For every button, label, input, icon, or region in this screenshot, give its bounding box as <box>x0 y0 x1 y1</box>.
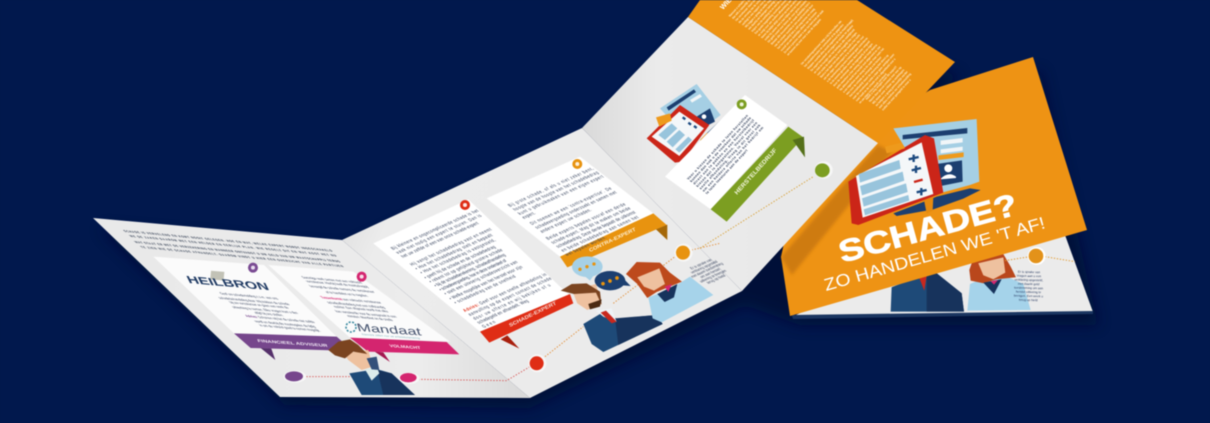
middle panel small caption: met daarin toestemming <box>690 262 724 279</box>
flap text column 2: was voor de schade en ontvangt u de factuur <box>844 56 883 96</box>
text: financieel adviseur <box>217 291 322 333</box>
text: volmacht: kan verzekerde voor de aanspraak in een <box>333 309 399 319</box>
person: contra-expert woman <box>626 262 713 322</box>
flap text column 1: het herstelbedrijf dat u zelf mag kiezen en vraag <box>776 7 816 50</box>
speech bubbles <box>572 256 631 290</box>
text: contra-expert: schade-expert. Mag dit te maken om beide <box>549 206 632 245</box>
text: schade-expert: Hij vangt het schadebedrag vast en neemt <box>408 227 493 267</box>
text: volmacht: schadeafhandeling met een zelfstandig <box>325 300 387 309</box>
purple ribbon <box>234 333 353 351</box>
text: volmacht: af te handelen en te regelen. <box>324 290 370 298</box>
flap text column 3: Heeft u nog vragen over dit traject? <box>864 65 898 101</box>
panel: left header text: WE DE ZAKEN DAAROM MET EEN HELDER EN EERLIJK PLAN. WIE REGELT DIT EN WAT KOST HET NU <box>128 235 338 257</box>
text: herstelbedrijf: kunnen dan ook u de voorkeur dat uw schade <box>689 116 752 183</box>
flap text column 2: Bent u het daar niet mee eens dan heeft u het recht <box>819 33 861 78</box>
flap text column 2: vast zodat de uitkering zo snel mogelijk kan volgen <box>815 31 858 76</box>
flap text column 1: en kunnen wij snel voor u aan de slag gaan <box>786 17 822 56</box>
panel: herstelbedrijf card <box>665 95 833 248</box>
flap text column 2: naar heeft en de schade snel is afgewikkeld voor u <box>854 57 897 102</box>
text: contra-expert: kunt u gebruikmaken van een eigen expert <box>516 174 605 216</box>
flap text column 3: Wij staan voor u klaar op werkdagen <box>871 68 906 105</box>
text: contra-expert: wel bepalen worden. <box>563 235 608 257</box>
flap text column 1: Zo weet u precies waar u aan toe bent met uw zaak <box>782 9 825 54</box>
green ribbon <box>711 127 803 222</box>
shadow from flap on cover <box>781 145 892 275</box>
cover small caption: Er is sprake van <box>1018 270 1040 274</box>
cover icon: form and card <box>848 119 981 225</box>
cover subtitle: ZO HANDELEN WE 'T AF! <box>822 213 1047 295</box>
cover small caption <box>1014 270 1044 302</box>
flap text column 2: u uw eigendom weer terug in de oude staat zoals het <box>841 47 885 93</box>
text: contra-expert: schadebedrag. Deze derde bepaalt de uitkomst <box>554 210 637 249</box>
panel: financieel adviseur card <box>153 257 353 360</box>
ribbon label: volmacht: VOLMACHT <box>388 343 422 350</box>
text: volmacht: minuten. Mandaat en de snelle <box>345 314 395 322</box>
text: contra-expert: Bij grote schade, of als u niet zeker bent, <box>506 166 595 208</box>
ribbon label: schade-expert: SCHADE-EXPERT <box>508 301 558 329</box>
middle panel small caption <box>689 258 728 285</box>
orange ribbon <box>560 213 667 267</box>
pink ribbon <box>350 338 459 354</box>
text: schade-expert: Geen <box>480 319 497 329</box>
text: herstelbedrijf: direct aan te pakken en een herstelbedrijf <box>692 118 756 185</box>
flap text column 2: polis waardoor u hier weinig risico aan loopt daarna <box>835 43 879 89</box>
flap text column 1: vooraf om een duidelijke offerte van de kosten <box>779 11 818 52</box>
flap text column 2: De expert beoordeelt vervolgens de schade ter plaatse <box>809 24 855 72</box>
icon: form and card on right panel <box>647 84 726 163</box>
back brochure: cover <box>781 57 1093 319</box>
text: contra-expert: Beide experts bepalen vooraf een derde <box>544 202 627 241</box>
cover small caption: brengen. Een week u <box>1014 294 1043 298</box>
cover title: SCHADE? <box>835 187 1021 270</box>
text: financieel adviseur: uitwerking te nemen. Elke vragen kunt u dan <box>230 305 300 315</box>
text: herstelbedrijf: snelle afhandeling. Vraag in dit geval ook <box>698 123 762 190</box>
flap text column 2: naar de verzekeraar zodat u daar geen omkijken meer <box>851 53 896 100</box>
flap text column 2: kloppen voordat alles wordt ingediend bij de maatschappij <box>806 18 854 70</box>
logo: Mandaat <box>346 322 424 340</box>
text: schade-expert: • Hoe het schadebedrag stelt en bepaalt <box>413 233 494 271</box>
text: schade-expert: • bij de schadeberekening, schadeafhandeling <box>432 252 507 288</box>
ribbon label: contra-expert: CONTRA-EXPERT <box>588 227 637 254</box>
text: schade-expert <box>389 208 553 329</box>
logo: Mandaat: financiele zaken voor uw schadebehandeling <box>361 333 421 340</box>
text: schade-expert: • rekent tot op gelijkheid grotere schade <box>427 247 504 284</box>
text: financieel adviseur: Geef uw schademelding z.s.m. aan ons <box>218 291 280 300</box>
cover small caption: Vragen aan u een <box>1017 274 1041 278</box>
open brochure <box>93 0 955 398</box>
drop shadows <box>100 20 1098 408</box>
text: schade-expert: door uw offerte en wij bekijken of u <box>471 283 552 321</box>
text: schade-expert: • schadevergoeding, hoe in deze onderdeel of <box>437 258 508 292</box>
flap text column 3: met alles rondom uw schademelding <box>877 72 912 109</box>
flap text column 2: het schadeformulier en controleert of de gegevens <box>802 23 845 68</box>
text: schade-expert: vaak niet nodig een expert te sturen. Dan is <box>394 213 483 255</box>
logo: Heilbron: HEILBRON <box>185 275 271 293</box>
text: schade-expert: aanvulling op de expert contact de schade <box>466 276 553 317</box>
middle panel small caption: om aan herstel <box>699 267 721 279</box>
flap text column 2: en stelt de hoogte van het bedrag in alle redelijkheid <box>812 28 856 74</box>
text: financieel adviseur: Advies: Schuiven wij het de schade niet zelfde <box>243 314 317 324</box>
ribbon label: financieel adviseur: FINANCIEEL ADVISEUR <box>256 338 328 348</box>
panel: left header text: WAT STAAT ER MET DE VERZEKERING EN WANNEER ONTVANGT U UW GELD VAN UW MAATSCHAPPIJ TERUG <box>133 241 342 263</box>
text: herstelbedrijf: te laten toesturen aan de expert <box>705 148 749 195</box>
text: contra-expert <box>506 166 640 257</box>
cover small caption: toestemming om aan <box>1014 286 1043 290</box>
text: schade-expert: Advies: Geef voor een snelle afhandeling in <box>461 272 548 313</box>
page: left panel <box>93 218 530 398</box>
text: volmacht: bevoegd de schade namens de verzekeraar <box>307 284 376 294</box>
timeline: left dots <box>284 367 530 384</box>
cover small caption: herstel uitkering te <box>1016 290 1041 294</box>
text: schade-expert: • stelt een uitvoerig schadeoverzicht van <box>442 259 519 296</box>
text: schade-expert: • geeft hij de schade en de schadebedrag <box>422 244 497 280</box>
text: schade-expert: • Hoe het schadebedrag is vastgesteld, <box>418 238 497 275</box>
text: herstelbedrijf: kiezen dat is aangesloten. Vooral voor een <box>695 121 758 188</box>
text: financieel adviseur: altijd bij ons stellen. <box>252 311 285 317</box>
logo: Mandaat: Mandaat <box>355 322 424 339</box>
text: financieel adviseur: in om de vakstel goed te nemen mogelijk. <box>257 323 322 333</box>
panel: contra-expert card <box>487 157 667 267</box>
text: financieel adviseur: bij uw verzekeraar en gaan aan werk de <box>227 300 291 309</box>
page: right panel <box>582 17 878 291</box>
text: volmacht: Sommige werk samen met een volmacht <box>300 275 364 285</box>
panel: schade-expert card <box>373 199 573 349</box>
text: schade-expert: schadegeld en afhandelt. Weg <box>475 298 530 325</box>
panel: left header text: SCHADE IS VERVELEND EN KOMT NOOIT GELEGEN. HOE EN WAT, WELKE EXPERT WORDT INGESCHAKELD <box>122 230 334 253</box>
panel: left header text: TE ZIEN WIE DE SCHADE AFHANDELT. DAAROM VINDT U HIER EEN OVERZICHT VAN ALLE PARTIJEN <box>139 246 345 268</box>
flap text column 2: Het herstelbedrijf stuurt de rekening dan direct op <box>848 53 890 98</box>
person: phone advisor <box>328 339 415 395</box>
ribbon label: herstelbedrijf: HERSTELBEDRIJF <box>734 147 779 196</box>
text: volmacht <box>300 275 399 322</box>
text: contra-expert: en beide schadebedrag aan samen het <box>559 215 640 253</box>
text: volmacht: verzekeraar. Hierbij heeft de maatschappij <box>304 279 370 289</box>
flap text column 2: Uw verzekeringsadviseur helpt u bij het invullen van <box>799 19 843 66</box>
cover small caption: terug op hield <box>1019 298 1038 302</box>
text: volmacht: rechter. Een afspraak wordt met elke <box>332 304 390 313</box>
flap text column 2: In de meeste gevallen worden deze kosten vergoed <box>828 40 871 85</box>
flap text column 3: zodat het snel geregeld is voor u <box>881 78 912 111</box>
flap text column 2: u de berekening nog eens helemaal gaat controleren <box>825 36 869 83</box>
cover small caption: met daarin geld <box>1018 282 1040 286</box>
text: herstelbedrijf: Voor u kiezen de schade te laten herstellen <box>686 114 749 181</box>
text: contra-expert: hoogte van de hoogte van het schadebedrag <box>511 170 600 212</box>
panel: volmacht card <box>268 265 459 362</box>
text: schade-expert: • schadebedrag van de snelheid <box>452 274 517 305</box>
page: middle panel <box>342 128 742 398</box>
orange cover <box>781 57 1087 316</box>
middle panel small caption: uitkering te brengen <box>699 269 728 284</box>
text: contra-expert: andere expert uw schaden. <box>538 208 593 234</box>
text: schade-expert: het uw zelfde of een van onze schade-expert <box>399 221 480 259</box>
flap text column 2: om een eigen contra-expert in te schakelen die voor <box>822 35 865 81</box>
text: contra-expert: expert. <box>520 211 537 220</box>
middle panel small caption: Er is sprake van <box>689 258 713 270</box>
flap text column 2: en uw eigen risico wordt verrekend <box>858 72 888 104</box>
text: contra-expert: schadevergoeding onderzoekt en samen met <box>533 190 618 230</box>
text: financieel adviseur: wordt en daarbij die maatregelen de tijdig <box>252 319 317 329</box>
orange flap text blocks <box>719 0 916 111</box>
text: herstelbedrijf: om een heldere offerte van het bedrijf om <box>701 126 765 193</box>
cover dotted timeline and dot <box>1005 247 1075 265</box>
text: financieel adviseur: schadebehandeling door. Wij trekken de schade <box>217 296 291 306</box>
flap text column 2: door de verzekeraar van de tegenpartij of uw eigen <box>832 42 874 87</box>
flap text column 2: Na akkoord wordt het herstel snel uitgevoerd en ziet <box>838 45 882 91</box>
middle panel small caption: terug op hield <box>706 274 727 285</box>
text: volmacht: Tussenkomst een volmacht verzekeraar <box>319 295 383 305</box>
timeline: middle dots <box>528 243 720 372</box>
red ribbon <box>480 294 573 343</box>
orange flap <box>688 0 955 143</box>
inner page of closed brochure <box>792 235 1093 319</box>
flap text column 1: van de schade voordat er iets wordt hersteld door <box>773 4 814 48</box>
cover small caption: verklaring opgesteld, <box>1014 278 1043 282</box>
flap text column 3: en helpen u graag persoonlijk verder <box>874 69 910 107</box>
text: contra-expert: Dit noemen we een 'contra-expertise'. De <box>528 186 613 226</box>
flap text column 1: Dit geldt zowel voor kleine als voor grote schades <box>766 0 808 43</box>
person: schade-expert man <box>561 283 663 352</box>
flap text column 3: Neem dan gerust contact met ons op <box>868 66 903 103</box>
cover people <box>891 254 1031 312</box>
flap text column 1: Bewaar alle documenten en maak duidelijke foto's <box>769 1 812 45</box>
panel: left header text <box>122 230 345 268</box>
text: schade-expert: • Welke mogelijke van het herstel voor zijn <box>447 264 524 301</box>
text: herstelbedrijf <box>686 114 765 195</box>
text: schade-expert: Bij kleinere en ongecompliceerde schade is het <box>389 208 480 251</box>
middle panel small caption: verklaring opgesteld <box>690 260 719 275</box>
